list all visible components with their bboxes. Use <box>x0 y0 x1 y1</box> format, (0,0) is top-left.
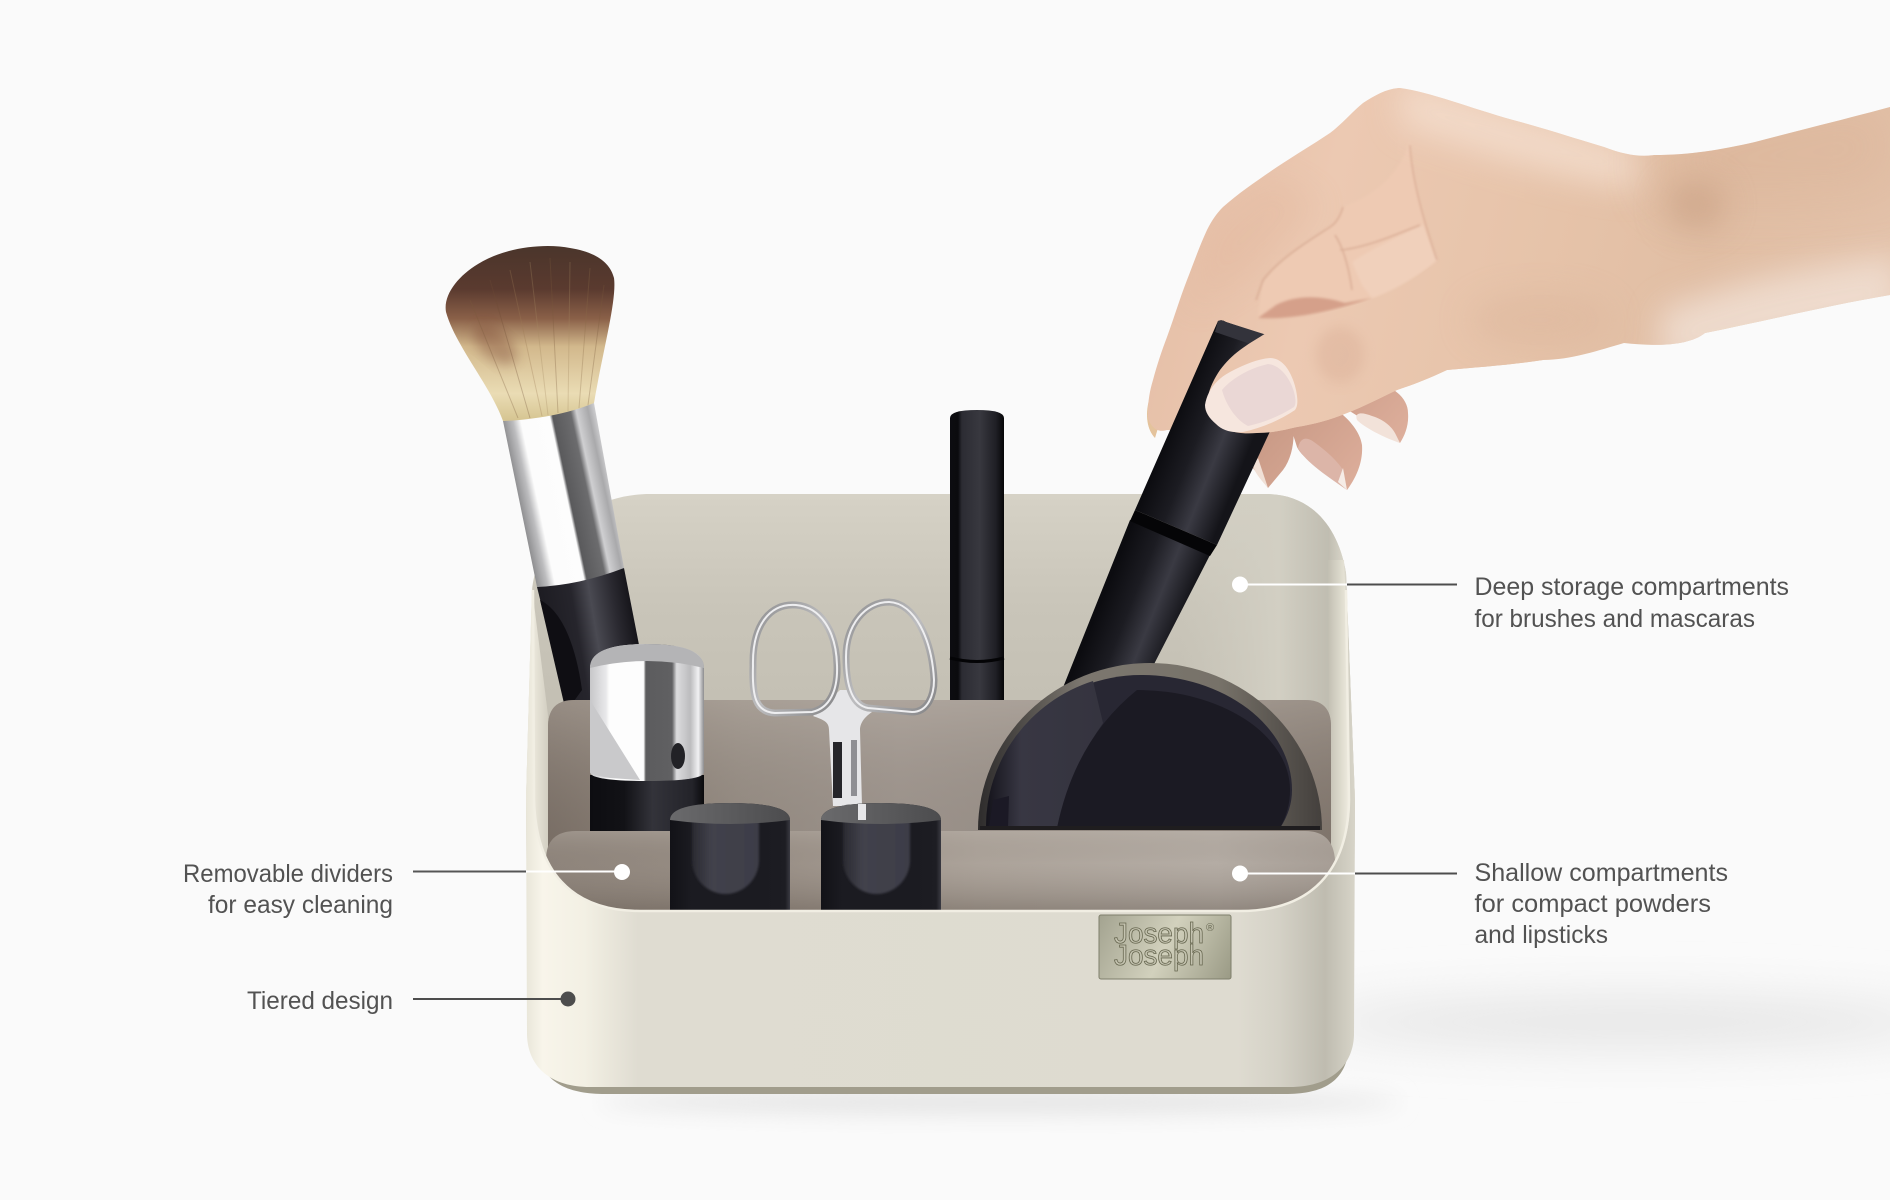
callout: tiered design: Tiered design <box>247 987 393 1015</box>
back fingers <box>1253 385 1408 490</box>
infographic: cosmetic organiser with callouts <box>184 88 1890 1118</box>
skin shading on back of hand and forearm <box>1316 80 1890 383</box>
callout: tiered design <box>247 987 576 1015</box>
black lipstick, right <box>821 803 941 911</box>
thumb <box>1207 267 1543 433</box>
inner side walls <box>526 560 1355 880</box>
index finger shading <box>1190 175 1320 310</box>
callout: deep storage compartments: Deep storage compartments <box>1474 573 1789 601</box>
index fingernail <box>1147 400 1158 438</box>
black lipstick, left <box>670 803 790 911</box>
rear divider <box>548 700 1331 860</box>
callout: deep storage compartments: for brushes and mascaras <box>1474 605 1755 633</box>
callout: shallow compartments: Shallow compartments <box>1474 859 1728 887</box>
chrome lipstick <box>590 644 704 831</box>
product: tiered organiser with contents <box>446 246 1355 1094</box>
rim highlight <box>533 590 1349 911</box>
mascara held by hand, lower section <box>1062 520 1210 690</box>
callout: shallow compartments: for compact powders <box>1474 890 1711 918</box>
callout: removable dividers: Removable dividers <box>183 860 393 888</box>
back tall wall <box>526 494 1355 920</box>
brand plate: Joseph <box>1114 940 1204 972</box>
brand plate <box>1099 915 1231 979</box>
curled fingers in palm <box>1256 140 1437 318</box>
back of hand and index finger <box>1148 88 1890 433</box>
brand plate: Joseph <box>1114 918 1204 950</box>
brush bristles <box>446 246 614 421</box>
shadow under organiser <box>600 998 1890 1114</box>
brush ferrule <box>503 403 624 587</box>
front wall and rim <box>526 573 1355 1087</box>
underside of organiser <box>538 1055 1348 1094</box>
callout: removable dividers: for easy cleaning <box>208 891 393 919</box>
front divider <box>546 831 1335 911</box>
callout: removable dividers <box>183 860 630 919</box>
center mascara wand <box>950 410 1004 701</box>
compact powder case <box>978 663 1322 830</box>
brand plate: ® <box>1206 922 1214 934</box>
scissors <box>753 602 934 806</box>
hand holding mascara <box>1130 80 1890 556</box>
callout: shallow compartments <box>1232 859 1728 949</box>
callout: deep storage compartments <box>1232 573 1789 633</box>
makeup brush handle <box>537 568 644 720</box>
mascara held by hand, upper section <box>1130 320 1308 556</box>
callout: shallow compartments: and lipsticks <box>1474 921 1608 949</box>
thumb nail <box>1205 358 1297 432</box>
